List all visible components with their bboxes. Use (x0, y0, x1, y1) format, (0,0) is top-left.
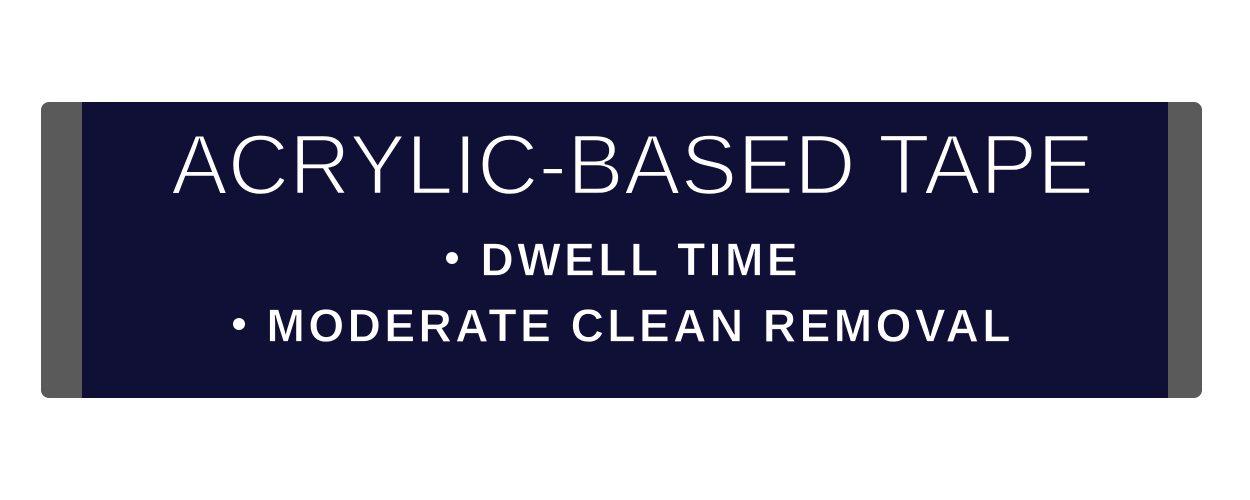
tape end tabs (41, 102, 1202, 398)
tape graphic (41, 102, 1202, 398)
bullet: moderate clean removal: MODERATE CLEAN REMOVAL (266, 300, 1010, 352)
tape body (82, 102, 1168, 398)
bullet: dwell time: DWELL TIME (480, 234, 798, 286)
title: ACRYLIC-BASED TAPE (171, 118, 1094, 213)
bullet list (233, 234, 1010, 352)
